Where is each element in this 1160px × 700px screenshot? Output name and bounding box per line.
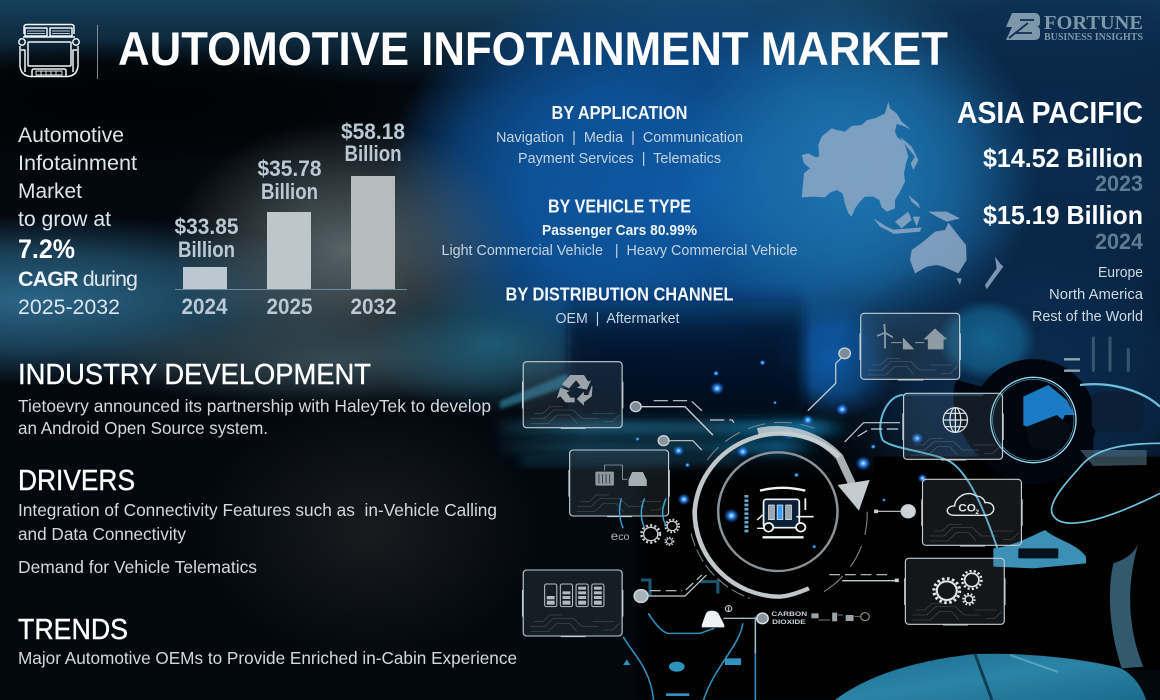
text block: CAGR summary: Automotive [18, 123, 124, 147]
panel: regional stats [957, 95, 1144, 325]
text block: CAGR summary [18, 123, 138, 319]
dashboard dark block [568, 285, 804, 416]
panel: segmentation: Passenger Cars 80.99% [542, 222, 697, 239]
sky blue behind dashboard [770, 300, 900, 420]
bar chart: market size: $33.85 [174, 214, 238, 239]
text block: industry development: INDUSTRY DEVELOPMENT [18, 359, 371, 391]
text block: CAGR summary: CAGR during [18, 267, 138, 291]
panel: segmentation: Light Commercial Vehicle | Heavy Commercial Vehicle [442, 242, 798, 259]
panel: segmentation: BY DISTRIBUTION CHANNEL [506, 284, 734, 304]
panel: CO2 [922, 479, 1022, 546]
bar chart: market size: $58.18 [341, 119, 405, 144]
diagram: connected vehicle HUD [522, 313, 1022, 653]
console [623, 580, 755, 700]
panel: regional stats: Europe [1098, 264, 1143, 281]
text block: drivers [18, 465, 497, 577]
panel: regional stats: 2024 [1095, 229, 1144, 254]
icon: carbon dioxide chain: DIOXIDE [772, 619, 806, 626]
panel: connectivity globe [903, 393, 1003, 460]
connectors [636, 355, 909, 596]
icon: central vehicle [746, 488, 814, 537]
panel: regional stats: $15.19 Billion [983, 200, 1143, 230]
text block: drivers: and Data Connectivity [18, 524, 186, 544]
logo: Fortune Business Insights: BUSINESS INSIGHTS [1044, 32, 1143, 43]
icon: eco gears [611, 498, 679, 545]
text block: CAGR summary: to grow at [18, 207, 111, 231]
text block: trends [18, 614, 517, 668]
panel: segmentation: Navigation | Media | Communication [496, 129, 743, 146]
bar chart: market size: 2024 [182, 294, 228, 319]
panel: battery levels [522, 570, 623, 637]
panel: segmentation: OEM | Aftermarket [556, 310, 680, 327]
text block: industry development: Tietoevry announced its partnership with HaleyTek to develop [18, 396, 491, 416]
text block: CAGR summary: Infotainment [18, 151, 137, 175]
bar chart: market size: $35.78 [258, 156, 322, 181]
ring: central cycle with arrow [691, 422, 870, 598]
text block: trends: Major Automotive OEMs to Provide Enriched in-Cabin Experience [18, 648, 517, 668]
text block: drivers: DRIVERS [18, 465, 135, 497]
panel: regional stats: Rest of the World [1032, 308, 1143, 325]
text block: trends: TRENDS [18, 614, 128, 646]
panel: segmentation: BY VEHICLE TYPE [548, 196, 691, 216]
panel: regional stats: ASIA PACIFIC [957, 95, 1143, 130]
icon: carbon dioxide chain [702, 606, 869, 653]
icon: infotainment head unit [19, 24, 79, 76]
text block: CAGR summary: Market [18, 179, 82, 203]
icon: carbon dioxide chain: CARBON [771, 611, 807, 618]
text block: CAGR summary: 7.2% [18, 234, 75, 264]
icon: eco gears: e [611, 528, 618, 543]
text block: drivers: Integration of Connectivity Features such as in-Vehicle Calling [18, 500, 497, 520]
panel: EV charging [569, 450, 669, 517]
panel: regional stats: North America [1049, 286, 1144, 303]
bar chart: market size: Billion [344, 141, 402, 166]
text block: industry development: an Android Open Source system. [18, 418, 268, 438]
text block: industry development [18, 359, 491, 438]
panel: segmentation [442, 103, 798, 327]
bar chart: market size [174, 119, 407, 319]
title divider [97, 25, 98, 79]
icon: eco gears: co [618, 532, 630, 543]
teal streaks [500, 373, 568, 409]
panel: segmentation: BY APPLICATION [552, 103, 688, 123]
panel: recycling [522, 362, 623, 428]
text block: drivers: Demand for Vehicle Telematics [18, 557, 257, 577]
logo: Fortune Business Insights: FORTUNE [1044, 12, 1143, 34]
bar chart: market size: Billion [261, 179, 318, 204]
panel: gears [905, 558, 1005, 625]
bar chart: market size: 2025 [266, 294, 312, 319]
text block: CAGR summary: 2025-2032 [18, 295, 120, 319]
seat [835, 654, 1146, 700]
steering wheel [827, 237, 1160, 668]
panel: CO2: 2 [975, 509, 979, 516]
panel: segmentation: Payment Services | Telematics [518, 150, 721, 167]
title: AUTOMOTIVE INFOTAINMENT MARKET [118, 22, 948, 75]
bar chart: market size: 2032 [350, 294, 396, 319]
panel: regional stats: $14.52 Billion [983, 143, 1143, 173]
panel: renewable energy home [860, 313, 960, 380]
panel: regional stats: 2023 [1095, 171, 1143, 196]
bar chart: market size: Billion [178, 237, 235, 262]
logo: Fortune Business Insights [1006, 12, 1143, 43]
map: Asia Pacific [802, 102, 1003, 289]
glowing dots [635, 360, 927, 549]
panel: CO2: CO [958, 503, 976, 514]
